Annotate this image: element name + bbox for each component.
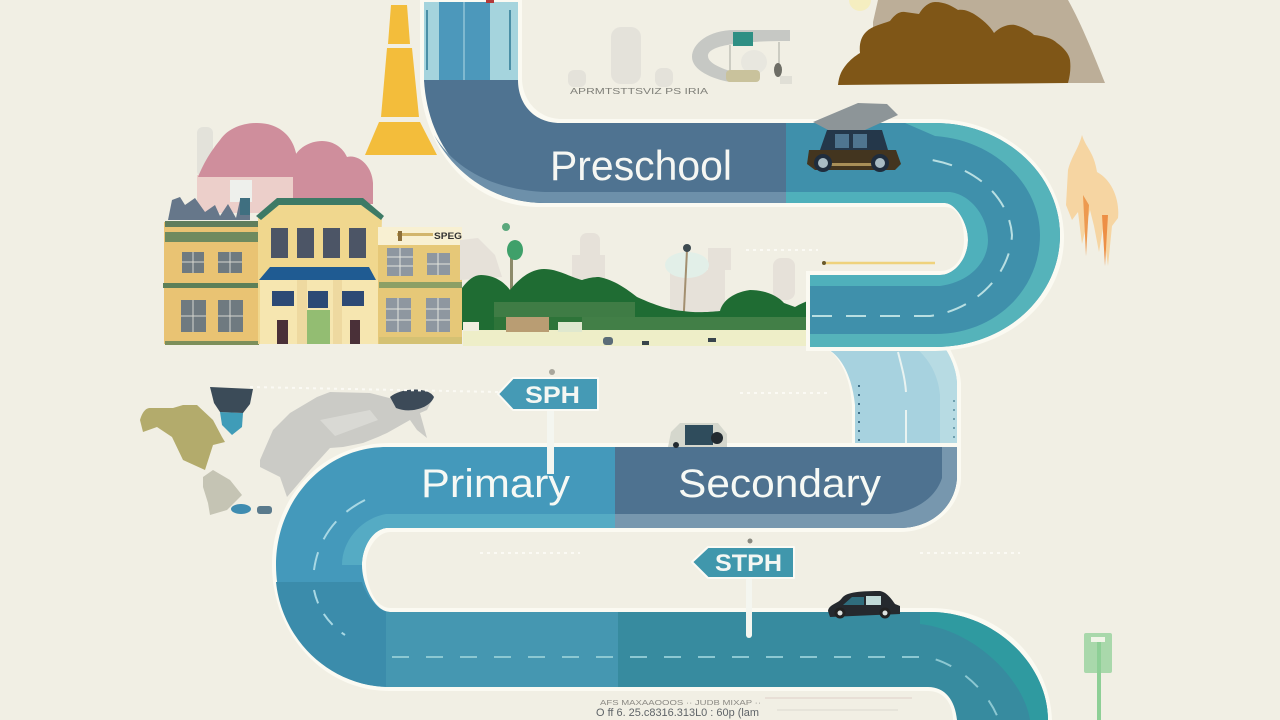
icon: brown car with roof load: [807, 103, 901, 172]
sign: SPH: SPH: [525, 382, 580, 409]
road label: Primary: Primary: [421, 462, 570, 506]
sign: STPH: STPH: [715, 550, 782, 577]
icon: lamp post with faint sign: [665, 244, 709, 330]
icon: green roadside sign: [1084, 633, 1112, 720]
icon: pink domes: [197, 123, 373, 213]
illustration: school building: [163, 197, 462, 345]
icon: brown hill: [838, 0, 1105, 85]
icon: orange flame trees: [1066, 135, 1118, 266]
road label: Preschool: Preschool: [550, 142, 732, 189]
decorative white dotted lines: [250, 250, 1020, 553]
text block: small bottom caption: [596, 698, 912, 719]
road: top section: [420, 0, 1064, 351]
illustration: green park strip: [462, 269, 810, 346]
icon: black van: [828, 591, 900, 618]
road: primary and secondary section: [272, 443, 1052, 720]
icon: small grey vehicle: [668, 423, 727, 448]
icon: world map: [140, 387, 434, 515]
text block: small bottom caption: AFS MAXAAOOOS ·· JUDB MIXAP ··: [600, 700, 761, 707]
icon: sun: [849, 0, 871, 11]
road label: Secondary: Secondary: [678, 462, 881, 506]
icon: palm tree: [502, 223, 523, 292]
icon: yellow tower: [365, 5, 437, 155]
road: light section: [818, 345, 961, 450]
illustration: school building: SPEG: [434, 231, 462, 241]
text block: small bottom caption: O ff 6. 25.c8316.313L0 : 60p (lam: [596, 707, 759, 719]
illustration: faded towers, middle: [460, 233, 795, 313]
icon: grey bridge and sign: [692, 30, 792, 84]
decorative yellow line: [822, 261, 935, 265]
caption: faint skyline text: APRMTSTTSVIZ PS IRIA: [570, 87, 709, 96]
sign: STPH: [692, 538, 794, 638]
illustration: faded skyline, top centre: [568, 27, 673, 87]
sign: SPH: [498, 369, 598, 474]
